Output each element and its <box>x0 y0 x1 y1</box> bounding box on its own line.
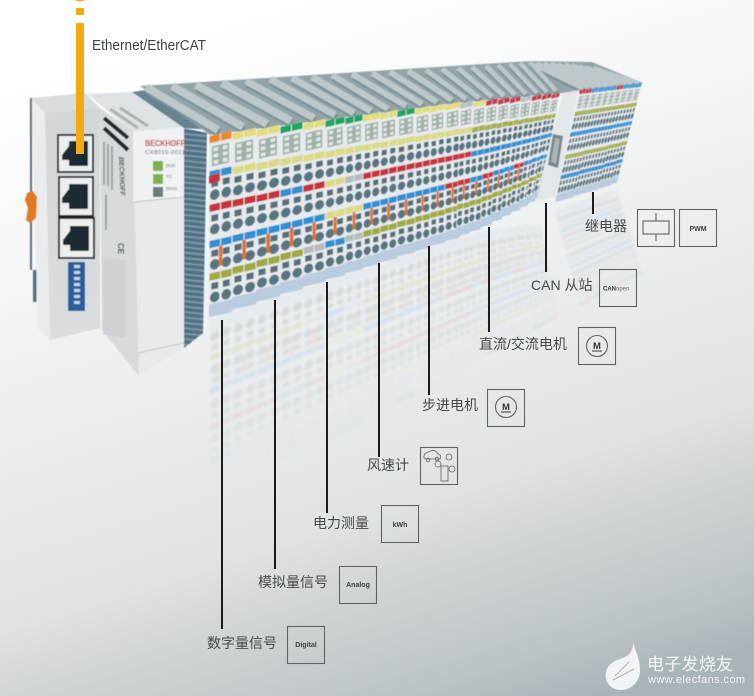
logo drop <box>606 643 640 690</box>
port 1 <box>57 134 94 173</box>
CAN coupler with D-sub connector <box>537 90 579 201</box>
ribbed heat sink <box>132 90 212 348</box>
top rails <box>140 61 643 135</box>
product photo: Beckhoff controller and I/O terminal rack <box>25 61 643 376</box>
status LEDs: BUS <box>166 163 175 168</box>
rack reflection <box>209 191 641 436</box>
icon: CANopen <box>600 270 636 306</box>
label: analog signal: 模拟量信号 <box>258 574 328 590</box>
icon: CANopen: CANopen <box>603 286 629 292</box>
label: power measurement: 电力测量 <box>313 515 369 531</box>
side print <box>104 142 112 230</box>
left tag accent on first module <box>209 173 220 184</box>
watermark url: www.elecfans.com <box>647 674 745 686</box>
DIP switch <box>68 262 85 311</box>
watermark text: 电子发烧友 <box>647 655 733 674</box>
orange clip <box>25 191 37 223</box>
port 3 <box>58 217 95 259</box>
brand: BECKHOFF <box>145 138 185 148</box>
label: stepper motor: 步进电机 <box>422 397 478 413</box>
leader lines <box>222 192 593 629</box>
controller CX8010: CE <box>116 243 125 255</box>
controller CX8010 <box>87 92 185 376</box>
label: anemometer: 风速计 <box>367 457 409 473</box>
controller CX8010: BECKHOFF <box>117 157 125 197</box>
status LEDs <box>153 161 178 197</box>
label: Ethernet/EtherCAT: Ethernet/EtherCAT <box>92 37 206 54</box>
icon: stepper motor <box>488 390 524 426</box>
icon: Digital: Digital <box>295 642 317 649</box>
label: relay: 继电器 <box>585 218 627 234</box>
label: DC/AC motor: 直流/交流电机 <box>479 336 567 352</box>
icon: Analog <box>340 566 376 604</box>
watermark logo <box>606 643 745 690</box>
icon: Analog: Analog <box>346 582 370 589</box>
icon: PWM <box>680 210 716 246</box>
icon: PWM: PWM <box>689 226 707 233</box>
icon: relay <box>638 210 674 246</box>
status LEDs: TC <box>166 174 173 179</box>
icon: motor: M <box>593 341 601 352</box>
status LEDs: DIAG <box>166 186 178 191</box>
icon: kWh <box>382 506 418 542</box>
icon: Digital <box>288 626 324 664</box>
coupler module with RJ45 ports <box>25 93 100 340</box>
label: CAN slave: CAN 从站 <box>531 277 592 293</box>
icon: kWh: kWh <box>393 522 407 529</box>
port 2 <box>58 176 94 217</box>
icon: motor <box>578 328 616 364</box>
icon: stepper motor: M <box>502 402 510 413</box>
Ethernet cable line <box>76 0 84 154</box>
icon: anemometer <box>420 448 458 484</box>
controller CX8010: CX8010-0011 <box>145 150 185 156</box>
label: digital signal: 数字量信号 <box>207 635 277 651</box>
terminal modules <box>209 83 642 317</box>
